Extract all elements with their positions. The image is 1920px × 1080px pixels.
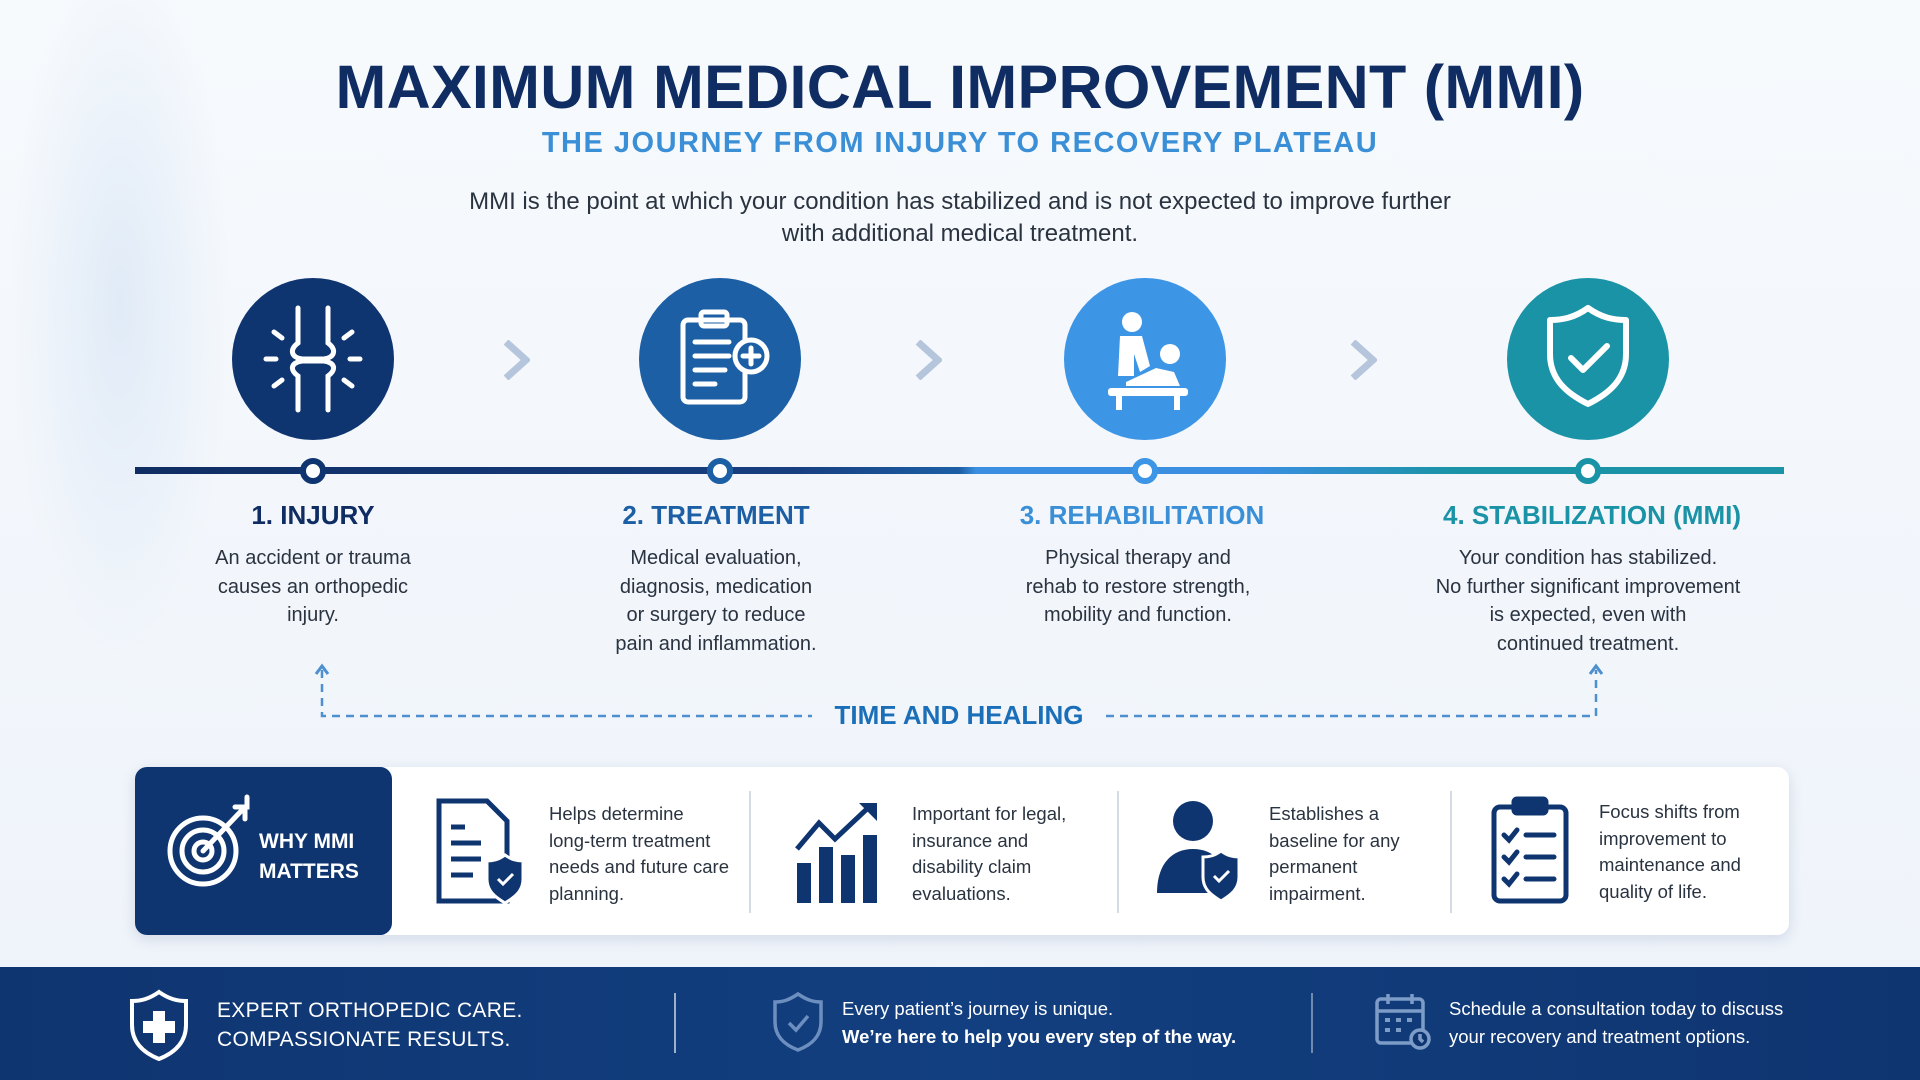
description: MMI is the point at which your condition has stabilized and is not expected to improve further with additional medical treatment. [469,188,1451,247]
arrow chevron 1 [504,340,530,380]
step 1 text: An accident or trauma [215,547,411,569]
icon: checklist clipboard [1492,796,1568,904]
step 2 text [615,547,817,654]
text: Important for legal, insurance and disability claim evaluations. [912,803,1066,904]
icon: person shield [1157,801,1238,900]
step 3 title: 3. REHABILITATION [1020,500,1264,530]
arrow chevron 3 [1350,340,1377,380]
text: Helps determine long-term treatment needs and future care planning. [549,803,729,904]
icon: calendar [1375,994,1431,1050]
header text [259,830,359,883]
icon: shield check outline [773,992,823,1052]
icon: shield check [1547,304,1629,407]
why mmi matters card [135,767,1789,935]
icon: target [168,794,250,886]
icon: medical shield [130,990,188,1061]
icon: document shield [436,798,522,904]
text: EXPERT ORTHOPEDIC CARE. [217,999,523,1022]
text [1449,998,1783,1047]
step 2: treatment [639,278,801,440]
item 4 [1492,796,1741,904]
step 1 text: causes an orthopedic [218,576,408,598]
step 3: rehabilitation [1064,278,1226,440]
step 2 title: 2. TREATMENT [622,500,810,530]
label: time and healing: TIME AND HEALING [835,700,1083,730]
dot 1 [300,458,326,484]
step 1: injury [232,278,394,440]
step 4 text: continued treatment. [1497,632,1679,654]
step 2 text: pain and inflammation. [615,632,817,654]
timeline [135,467,1784,474]
icon: clipboard [680,310,770,404]
title: MAXIMUM MEDICAL IMPROVEMENT (MMI) [335,53,1585,121]
step 3 text: rehab to restore strength, [1026,576,1250,598]
step 4 text: No further significant improvement [1436,576,1740,598]
footer item 2 [773,992,1236,1052]
dot 4 [1575,458,1601,484]
header text: WHY MMI [259,830,354,853]
step 4: stabilization [1507,278,1669,440]
step 4 text: is expected, even with [1490,604,1686,626]
step 3 text: Physical therapy and [1045,547,1231,569]
subtitle: THE JOURNEY FROM INJURY TO RECOVERY PLATEAU [542,127,1378,159]
text: your recovery and treatment options. [1449,1026,1750,1047]
header text: MATTERS [259,860,359,883]
step 2 text: diagnosis, medication [620,576,812,598]
step 2 text: Medical evaluation, [630,547,802,569]
icon: bar chart trend [795,803,877,903]
dot 3 [1132,458,1158,484]
icon: knee joint [264,306,362,412]
step 1 text: injury. [287,604,339,626]
text: Focus shifts from improvement to maintenance and quality of life. [1599,801,1741,902]
step 3 text: mobility and function. [1044,604,1232,626]
text: We’re here to help you every step of the way. [842,1026,1236,1047]
item 3 [1157,801,1400,904]
text: Schedule a consultation today to discuss [1449,998,1783,1019]
footer [0,967,1920,1080]
footer item 1 [130,990,523,1061]
arrow chevron 2 [916,340,942,380]
step 1 text [215,547,411,626]
text [217,999,523,1051]
text: Establishes a baseline for any permanent impairment. [1269,803,1400,904]
step 3 text [1026,547,1250,626]
icon: therapist [1108,312,1188,410]
step 4 title: 4. STABILIZATION (MMI) [1443,500,1741,530]
dark header block [135,767,392,935]
decorative bone background [0,0,260,760]
text: Every patient’s journey is unique. [842,998,1113,1019]
step 2 text: or surgery to reduce [626,604,805,626]
footer item 3 [1375,994,1783,1050]
text [842,998,1236,1047]
step 1 title: 1. INJURY [251,500,375,530]
item 2 [795,803,1066,904]
item 1 [436,798,729,904]
time and healing bracket [314,664,1604,730]
dot 2 [707,458,733,484]
step 4 text [1436,547,1740,654]
text: COMPASSIONATE RESULTS. [217,1028,511,1051]
step 4 text: Your condition has stabilized. [1459,547,1717,569]
